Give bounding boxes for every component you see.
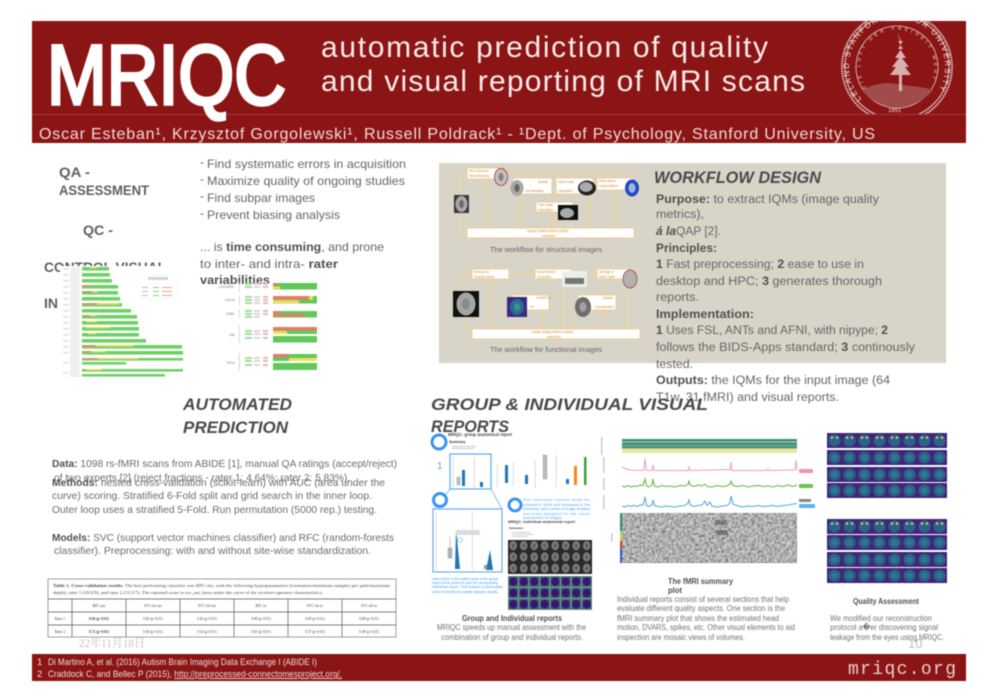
caption: fMRI summary plot: The fMRI summary: [668, 576, 733, 586]
text: workflow description: metrics),: [656, 209, 704, 221]
figure: quality assessment mosaics before: [827, 433, 947, 498]
text: prediction methods: Data: 1098 rs-fMRI scans from ABIDE [1], manual QA ratings (accept/reject): [52, 458, 397, 470]
figure: quality assessment mosaics after: [827, 519, 947, 583]
diagram: structural workflow: normalization: [525, 189, 544, 193]
diagram: structural workflow: extraction: [542, 234, 556, 238]
individual report mosaics: [508, 520, 592, 610]
caption: group and individual reports: [437, 613, 586, 642]
subtitle: [321, 31, 805, 98]
text: QA and QC heading: QA -: [59, 164, 90, 180]
note: individual reports: volumetric IQMs and metadata in the: [523, 503, 590, 507]
diagram: functional workflow: normalization: [595, 305, 614, 309]
framewise displacement trace: [622, 479, 813, 488]
chart: site-wise rating strips: UCLA: [225, 298, 235, 302]
text: workflow description: follows the BIDS-Apps standard; 3 continously: [656, 342, 915, 354]
diagram: functional workflow: Despike steps: [474, 275, 494, 279]
subtitle: and visual reporting of MRI scans: [321, 65, 805, 98]
heading: automated prediction: AUTOMATED: [182, 396, 292, 414]
project URL: mriqc.org: [848, 660, 956, 680]
table: cross-validation results: RFC-zs: [256, 604, 267, 608]
text: quality assessment description: [830, 613, 944, 642]
chart: site-wise rating strips: [219, 282, 320, 377]
text: workflow description: á laQAP [2].: [656, 226, 721, 238]
caption: group and individual reports: MRIQC speeds up manual assessment with the: [437, 622, 586, 632]
table: cross-validation results: 0.82 (p<0.01): [197, 617, 218, 621]
marker 2: [434, 494, 446, 506]
text: prediction methods: classifier). Preprocessing: with and without site-wise standardization.: [54, 545, 371, 557]
motion traces band: [622, 439, 797, 453]
text: QA goals list: -: [200, 189, 204, 203]
chart: fMRI summary plot: [601, 437, 815, 563]
text: time consuming note: [200, 240, 384, 287]
text: prediction methods: Models: SVC (support vector machines classifier) and RFC (random-forests: [52, 532, 394, 544]
subtitle: automatic prediction of quality: [321, 31, 768, 64]
table: cross-validation results: [48, 579, 396, 637]
text: QA goals list: -: [200, 155, 204, 169]
diagram: structural workflow: Brain tissue: [599, 179, 616, 183]
text: QA goals list: [200, 155, 406, 222]
diagram: structural workflow: Spatial: [538, 180, 548, 184]
table: cross-validation results: Rater 2: [55, 630, 65, 634]
text: time consuming note: to inter- and intra- rater: [200, 257, 338, 271]
marker 1: [432, 435, 446, 472]
chart: rater agreement bars: [60, 266, 190, 380]
text: workflow description: tested.: [656, 359, 693, 371]
diagram: functional workflow: Head-motion: [537, 270, 555, 274]
text: QA and QC heading: IN: [44, 295, 58, 311]
note: individual reports: and plots designed for the visual: [523, 512, 590, 516]
chart: site-wise rating strips: UM: [229, 333, 235, 337]
individual report mosaics: Summary:: [509, 526, 524, 530]
diagram: functional workflow: Average &: [599, 270, 615, 274]
text: workflow description: 1 Uses FSL, ANTs and AFNI, with nipype; 2: [656, 325, 888, 337]
note: scatter plots: report can be clicked to open the corresponding: [432, 581, 498, 585]
table: cross-validation results: Table 1. Cross-validation results. The best performing classifier was RFC-ms, with the following hyperparameters (estimators/minimum samples per split/maximum: [53, 584, 390, 589]
zoom connector lines: [433, 489, 502, 510]
diagram: structural workflow: calculation: [558, 189, 573, 193]
footer band: [32, 654, 966, 681]
marker 3: [509, 499, 521, 511]
authors and affiliation: Oscar Esteban¹, Krzysztof Gorgolewski¹, Russell Poldrack¹ - ¹Dept. of Psychology, Stanford University, US: [39, 126, 875, 143]
caption: group and individual reports: combination of group and individual reports.: [441, 632, 583, 642]
table: cross-validation results: 0.65 (p<0.01): [251, 630, 272, 634]
text: quality assessment description: We modified our reconstruction: [830, 613, 932, 623]
diagram: structural workflow: Image Quality Metrics (IQMs): [527, 229, 568, 233]
diagram: functional workflow: correction: [537, 275, 551, 279]
table: cross-validation results: SVC-rbf-zs: [361, 604, 378, 608]
references: Craddock C, and Bellec P (2015), http://preprocessed-connectomesproject.org/.: [48, 669, 342, 680]
table: cross-validation results: depth): rater 1 (18/2/9), and rater 2 (11/2/7). The reported score is roc_auc (area under the curve of the receiver-operator characteristic).: [53, 591, 323, 596]
figure: group and individual reports: [432, 432, 592, 610]
text: fMRI summary description: Individual reports consist of several sections that help: [617, 594, 789, 604]
heading: group and individual visual reports: REPORTS: [431, 418, 509, 436]
text: fMRI summary description: motion, DVARS, spikes, etc. Other visual elements to aid: [617, 622, 795, 632]
text: QA goals list: -: [200, 172, 204, 186]
text: QA goals list: -: [200, 206, 204, 220]
caption: group and individual reports: Group and Individual reports: [462, 613, 562, 623]
panel: workflow design: [439, 163, 946, 363]
chart: site-wise rating strips: LEUVEN: [219, 285, 234, 289]
zoomed box plot: [433, 509, 502, 572]
note: individual reports: The individual reports show the: [523, 498, 590, 502]
table: cross-validation results: 0.63 (p<0.01): [197, 630, 218, 634]
caption: fMRI summary plot: plot: [668, 585, 682, 595]
table: cross-validation results: 0.82 (p<0.01): [143, 617, 164, 621]
chart: site-wise rating strips: USM: [226, 312, 234, 316]
diagram: functional workflow: Remove &: [474, 270, 490, 274]
text: prediction methods: [52, 458, 397, 557]
icon: functional thumbnails: [453, 270, 637, 317]
diagram: functional workflow: Image Quality Metrics (IQMs): [532, 330, 573, 334]
title: MRIQC: MRIQC: [47, 28, 286, 122]
legend: [140, 275, 177, 299]
icon: brain thumbnails: [454, 168, 639, 220]
axis ticks: [601, 437, 612, 542]
references: [37, 657, 342, 680]
text: prediction methods: curve) scoring. Stratified 6-Fold split and grid search in the inner loop.: [52, 490, 372, 502]
table: cross-validation results: SVC-lin-zs: [307, 604, 324, 608]
caption: The workflow for structural images: [490, 245, 602, 254]
diagram: functional workflow: [453, 269, 640, 354]
text: prediction methods: Methods: nested cross-validation (scikit-learn) with AUC (area under the: [52, 477, 385, 489]
diagram: structural workflow: "hat" mask: [538, 203, 554, 207]
icon: Stanford seal: LELAND STANFORD JUNIOR UNIVERSITY: [842, 20, 952, 103]
carpet plot: [620, 513, 797, 563]
heading: group and individual visual reports: [431, 396, 708, 436]
text: prediction methods: Outer loop uses a stratified 5-Fold. Run permutation (5000 rep.) testing.: [52, 504, 377, 516]
text: QA and QC heading: ASSESSMENT: [59, 182, 149, 198]
icon: Stanford seal: DIE LUFT DER FREIHEIT WEHT: [856, 26, 938, 90]
slide date: 22年11月18日: [79, 635, 145, 650]
individual report mosaics: MRIQC: Individual anatomical report: [508, 520, 576, 524]
text: workflow description: Purpose: to extract IQMs (image quality: [656, 194, 879, 206]
report title: MRIQC: group anatomical report: [448, 432, 512, 437]
marker 1: 1: [437, 461, 443, 472]
text: workflow description: reports.: [656, 292, 699, 304]
table: cross-validation results: 0.66 (p<0.01): [143, 630, 164, 634]
table: cross-validation results: 0.57 (p<0.01): [305, 630, 326, 634]
text: workflow description: [656, 194, 915, 404]
slide number: 10: [908, 636, 922, 651]
note: scatter plots: Data points in the scatter plots of the group: [432, 577, 498, 581]
text: quality assessment description: leakage from the eyes using MRIQC.: [830, 632, 944, 642]
note: individual reports: assessment of images.: [523, 516, 563, 520]
text: QA goals list: Prevent biasing analysis: [207, 208, 340, 222]
note: scatter plots: [432, 577, 503, 594]
text: workflow description: Implementation:: [656, 309, 754, 321]
DVARS trace: [622, 458, 813, 473]
text: workflow description: T1w, 31 fMRI) and visual reports.: [656, 392, 839, 404]
heading: automated prediction: PREDICTION: [183, 419, 289, 437]
table: cross-validation results: 0.88 (p<0.01): [251, 617, 272, 621]
text: workflow description: 1 Fast preprocessing; 2 ease to use in: [656, 259, 864, 271]
diagram: functional workflow: Brain mask: [599, 275, 615, 279]
table: cross-validation results: SVC-rbf-nzs: [198, 604, 217, 608]
group box plots: [450, 454, 586, 489]
chart: site-wise rating strips: NYU: [227, 361, 235, 365]
text: workflow description: Outputs: the IQMs for the input image (64: [656, 375, 891, 387]
text: time consuming note: variabilities: [200, 273, 270, 287]
diagram: structural workflow: Head mask: [558, 180, 575, 184]
note: individual reports: [523, 498, 590, 520]
text: workflow description: desktop and HPC; 3 generates thorough: [656, 276, 882, 288]
text: fMRI summary description: inspection are mosaic views of volumes.: [617, 632, 745, 642]
note: scatter plots: individual report. This feature is particularly: [432, 585, 503, 589]
header banner: [31, 20, 967, 144]
caption: The workflow for functional images: [490, 345, 602, 354]
table: cross-validation results: SVC-lin-nzs: [144, 604, 163, 608]
text: workflow description: Principles:: [656, 243, 717, 255]
references: Di Martino A, et al. (2016) Autism Brain Imaging Data Exchange I (ABIDE I): [48, 657, 317, 668]
diagram: functional workflow: DVARS &: [537, 296, 552, 300]
caption: fMRI summary plot: [668, 576, 733, 595]
diagram: structural workflow: [454, 168, 639, 254]
figure: group and individual reports: Summary: [449, 440, 465, 444]
diagram: structural workflow: Skull-stripping: [469, 174, 489, 178]
text: fMRI summary description: evaluate different quality aspects. One section is the: [617, 603, 785, 613]
global signal trace: [622, 496, 815, 508]
diagram: functional workflow: Spatial: [603, 296, 613, 300]
text: fMRI summary description: fMRI summary plot that shows the estimated head: [617, 613, 779, 623]
table: cross-validation results: 0.72 (p<0.01): [89, 630, 110, 634]
table: cross-validation results: 0.89 (p<0.01): [305, 617, 326, 621]
text: prediction methods: of two experts [2] (reject fractions - rater 1: 4.64%; rater 2: 5.83%).: [54, 472, 350, 484]
table: cross-validation results: RFC-nzs: [93, 604, 106, 608]
references: 2: [37, 669, 42, 680]
icon: Stanford seal: 1891: [888, 108, 902, 114]
text: QA goals list: Maximize quality of ongoing studies: [207, 174, 405, 188]
table: cross-validation results: Rater 1: [55, 617, 65, 621]
heading: automated prediction: [182, 396, 292, 437]
heading: workflow design: WORKFLOW DESIGN: [654, 169, 822, 187]
text: quality assessment description: protocol a�er discovering signal: [830, 621, 938, 632]
diagram: functional workflow: extraction: [547, 335, 561, 339]
caption: quality assessment: Quality Assessment: [853, 596, 919, 606]
diagram: structural workflow: calculation: [538, 208, 553, 212]
heading: group and individual visual reports: GROUP & INDIVIDUAL VISUAL: [431, 396, 708, 414]
note: individual reports: Summary, and a series of image mosaics: [523, 507, 590, 511]
diagram: structural workflow: segmentation: [599, 184, 618, 188]
text: QA goals list: Find subpar images: [207, 191, 315, 205]
text: fMRI summary description: [617, 594, 795, 642]
references: 1: [37, 657, 42, 668]
text: time consuming note: ... is time consuming , and prone: [200, 240, 384, 254]
diagram: structural workflow: N4 Correction: [469, 169, 489, 173]
table: cross-validation results: 0.94 (p<0.01): [89, 617, 110, 621]
table: cross-validation results: 0.88 (p<0.01): [359, 617, 380, 621]
text: QA and QC heading: QC -: [83, 222, 113, 238]
note: scatter plots: useful to identify low quality datasets visually.: [432, 590, 498, 594]
diagram: functional workflow: FD: [530, 305, 535, 309]
text: QA goals list: Find systematic errors in acquisition: [207, 157, 406, 171]
text: QA and QC heading: CONTROL VISUAL: [44, 259, 166, 275]
table: cross-validation results: 0.48 (p<0.65): [359, 630, 380, 634]
text: QA and QC heading: [44, 164, 166, 311]
